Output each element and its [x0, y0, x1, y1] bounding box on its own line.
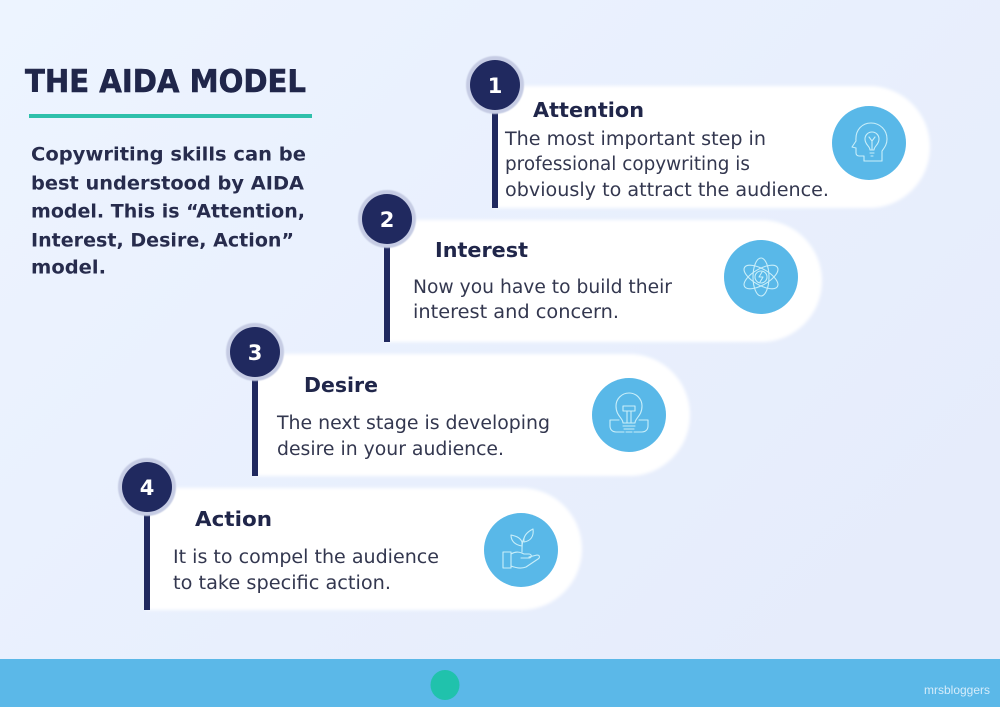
step 1 badge: 1: [488, 74, 502, 98]
step 2 bar: [384, 224, 390, 342]
step 4 badge: [118, 458, 176, 516]
title underline: [29, 114, 312, 118]
step 2 badge: [358, 190, 416, 248]
icon: atom: [724, 240, 798, 314]
icon: head with light bulb: [832, 106, 906, 180]
step 1 text: The most important step in: [504, 129, 766, 150]
step 4 badge: 4: [140, 476, 154, 500]
card 4: [146, 488, 582, 610]
step 3 text: [276, 413, 550, 460]
panel: step 2 interest: [358, 190, 822, 342]
step 3 text: desire in your audience.: [277, 439, 504, 460]
step 2 text: interest and concern.: [413, 302, 619, 323]
intro text: Interest, Desire, Action”: [31, 230, 294, 252]
icon: light bulb in hands: [592, 378, 666, 452]
step 4 text: to take specific action.: [173, 573, 391, 594]
title: THE AIDA MODEL: [25, 64, 306, 100]
watermark: mrsbloggers: [924, 683, 990, 697]
card 1: [493, 86, 930, 208]
step 1 heading: Attention: [533, 98, 644, 122]
step 1 bar: [492, 90, 498, 208]
step 3 bar: [252, 358, 258, 476]
step 4 bar: [144, 492, 150, 610]
step 3 heading: Desire: [304, 373, 378, 397]
panel: step 4 action: [118, 458, 582, 610]
step 1 text: professional copywriting is: [505, 154, 750, 175]
panel: step 1 attention: [466, 56, 930, 208]
card 3: [254, 354, 690, 476]
step 2 heading: Interest: [435, 238, 528, 262]
step 3 text: The next stage is developing: [276, 413, 550, 434]
step 4 heading: Action: [195, 507, 272, 531]
step 2 text: [413, 277, 672, 323]
card 2: [385, 220, 822, 342]
step 2 text: Now you have to build their: [413, 277, 672, 298]
step 3 badge: [226, 323, 284, 381]
step 1 badge: [466, 56, 524, 114]
panel: step 3 desire: [226, 323, 690, 476]
footer band: [0, 659, 1000, 707]
step 2 badge: 2: [380, 208, 394, 232]
step 4 text: It is to compel the audience: [173, 547, 439, 568]
intro text: [31, 144, 306, 278]
intro text: model.: [31, 256, 106, 278]
intro text: best understood by AIDA: [31, 172, 304, 194]
intro text: model. This is “Attention,: [31, 200, 305, 222]
intro text: Copywriting skills can be: [31, 144, 306, 166]
icon: plant in hand: [484, 513, 558, 587]
step 4 text: [173, 547, 439, 594]
step 1 text: obviously to attract the audience.: [505, 180, 829, 201]
step 3 badge: 3: [248, 341, 262, 365]
footer accent dot: [430, 670, 460, 700]
step 1 text: [504, 129, 829, 201]
